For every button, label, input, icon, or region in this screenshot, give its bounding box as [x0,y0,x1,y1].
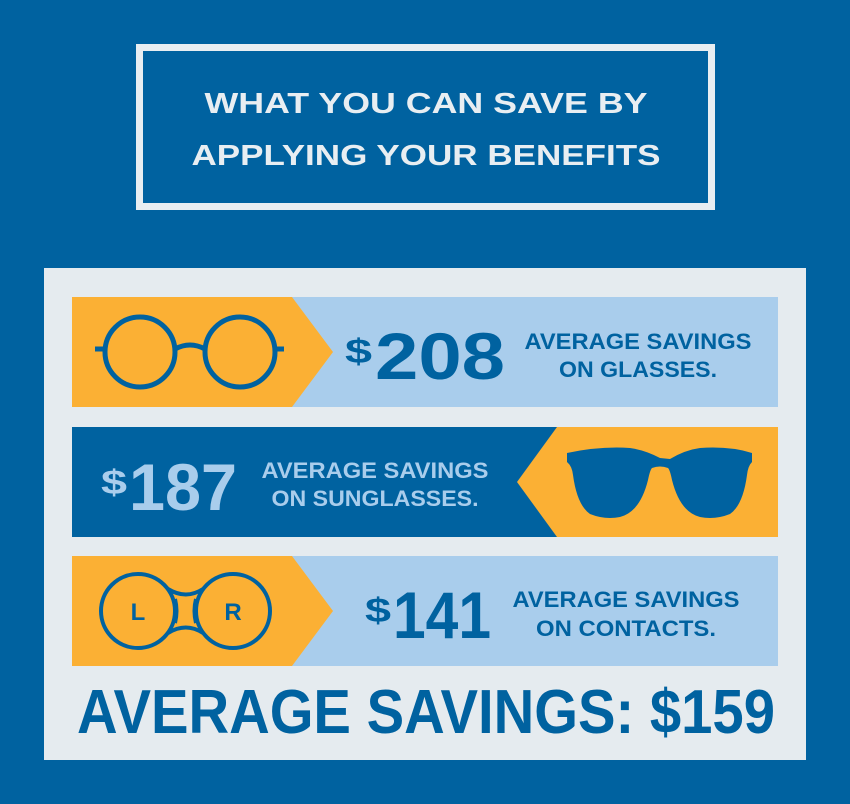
label: glasses: AVERAGE SAVINGS [524,329,752,354]
label: sunglasses: AVERAGE SAVINGS [262,458,488,483]
amount: $187: $ [101,464,127,502]
panel: savings [44,268,806,760]
label: glasses: ON GLASSES. [559,357,717,382]
row: glasses [72,297,778,407]
label: glasses [524,329,752,382]
label: contacts [512,587,740,641]
label: contacts: AVERAGE SAVINGS [512,587,740,612]
icon: contact lens case: L [131,599,145,626]
title [140,48,712,206]
label: sunglasses: ON SUNGLASSES. [272,486,478,511]
icon: contact lens case: R [224,599,242,626]
total average savings: AVERAGE SAVINGS: $159 [77,678,775,747]
title: APPLYING YOUR BENEFITS [192,140,660,172]
row: sunglasses [72,427,778,537]
label: contacts: ON CONTACTS. [536,616,716,641]
amount: $141: $ [365,592,391,630]
amount: $208 [345,319,505,393]
amount: $208: 208 [375,319,505,393]
row: contacts [72,556,778,666]
amount: $187: 187 [129,450,237,524]
amount: $208: $ [345,333,372,371]
label: sunglasses [262,458,488,511]
icon: contact lens case [101,574,270,648]
title: WHAT YOU CAN SAVE BY [204,88,648,120]
amount: $141: 141 [393,578,491,652]
icon: sunglasses [567,448,752,518]
icon: glasses [95,317,284,387]
